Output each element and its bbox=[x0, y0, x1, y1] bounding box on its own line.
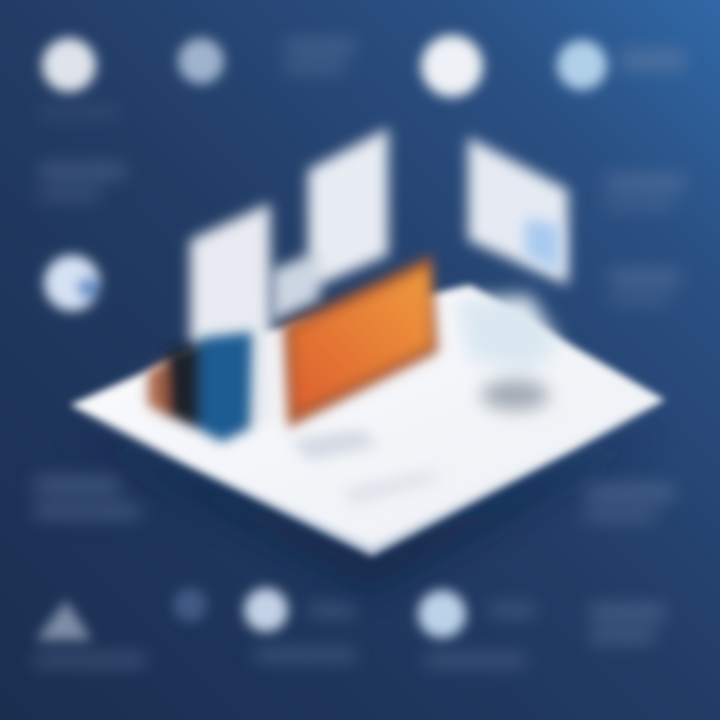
left white column bbox=[190, 203, 272, 430]
platform detail lines bbox=[290, 430, 440, 505]
orange panel bbox=[283, 255, 438, 428]
right document panel bbox=[468, 137, 568, 285]
blurred text blocks bbox=[35, 40, 685, 665]
blue document detail bbox=[525, 218, 560, 272]
bar chart and panels bbox=[148, 128, 568, 505]
platform shadow bbox=[60, 425, 670, 590]
dark and blue column bbox=[148, 332, 252, 442]
icons top row bbox=[42, 35, 607, 97]
icon left bbox=[44, 255, 100, 311]
back white bar bbox=[272, 128, 388, 322]
icons bottom row bbox=[36, 588, 466, 640]
platform bbox=[70, 285, 665, 556]
magnifier and chart detail bbox=[455, 295, 560, 410]
